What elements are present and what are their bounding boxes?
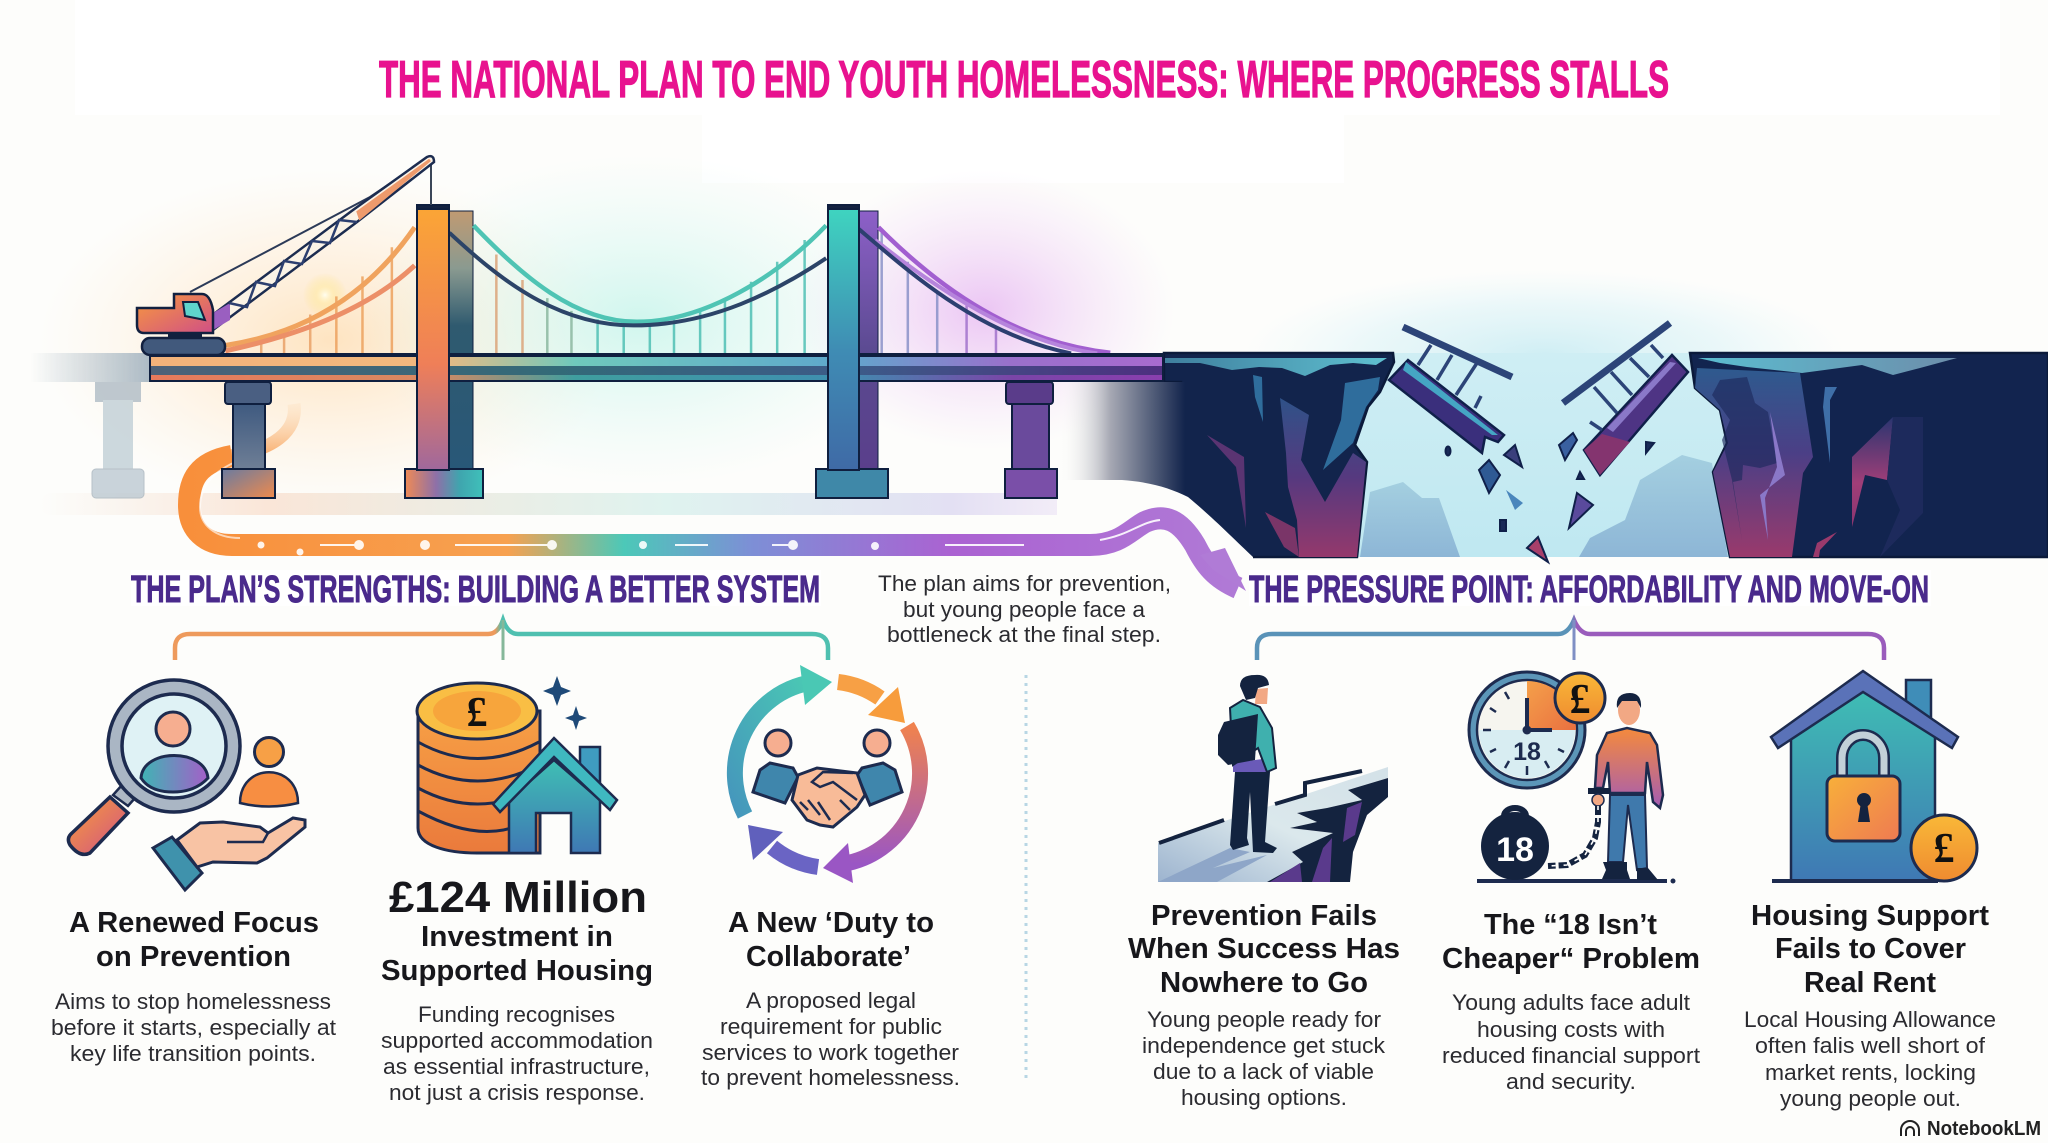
- illustration: bridge: [30, 156, 1164, 498]
- callout text: The plan aims for prevention,: [878, 571, 1171, 596]
- icon: locked house and coin: [1771, 671, 1977, 881]
- body text: housing costs with: [1477, 1017, 1665, 1042]
- watermark: NotebookLM: NotebookLM: [1927, 1118, 2041, 1140]
- heading: Real Rent: [1804, 967, 1936, 999]
- body text: market rents, locking: [1765, 1060, 1976, 1085]
- icon: coins and house: £: [466, 690, 488, 736]
- icon: clock, coin, ball and chain, person: 18: [1496, 831, 1534, 869]
- body text: Funding recognises: [418, 1002, 615, 1027]
- heading: Nowhere to Go: [1160, 967, 1368, 999]
- item: 18 isn't cheaper: [1442, 672, 1700, 1094]
- heading: [1128, 900, 1400, 999]
- body text: services to work together: [702, 1040, 959, 1065]
- left section heading: THE PLAN’S STRENGTHS: BUILDING A BETTER SYSTEM: [131, 569, 820, 611]
- body text: as essential infrastructure,: [383, 1054, 650, 1079]
- left section heading: [131, 569, 821, 611]
- heading: Supported Housing: [381, 955, 653, 987]
- body text: Young people ready for: [1147, 1007, 1381, 1032]
- heading: The “18 Isn’t: [1484, 909, 1657, 941]
- body text: reduced financial support: [1442, 1043, 1700, 1068]
- bracket: strengths: [175, 620, 828, 660]
- body text: not just a crisis response.: [389, 1080, 645, 1105]
- heading: A Renewed Focus: [69, 907, 319, 939]
- body text: to prevent homelessness.: [701, 1065, 960, 1090]
- body text: A proposed legal: [746, 988, 916, 1013]
- heading: Housing Support: [1751, 900, 1989, 932]
- icon: magnifier, person and hand: [68, 680, 305, 890]
- heading: Prevention Fails: [1151, 900, 1377, 932]
- piers: [222, 205, 1057, 498]
- body text: [381, 1002, 653, 1105]
- heading: When Success Has: [1128, 933, 1400, 965]
- body text: Aims to stop homelessness: [55, 989, 331, 1014]
- item: housing support: [1744, 671, 1996, 1111]
- illustration: broken bridge gap with cliffs: [1164, 270, 2048, 562]
- ghost pier: [92, 382, 144, 498]
- rear towers: [449, 211, 473, 498]
- heading: £124 Million: [389, 873, 647, 922]
- illustration: road to the gap: [189, 404, 1246, 591]
- item: investment: [381, 676, 653, 1105]
- crane: [137, 156, 434, 355]
- callout text: bottleneck at the final step.: [887, 622, 1161, 647]
- body text: requirement for public: [720, 1014, 942, 1039]
- icon: handshake in cycle arrows: [735, 665, 920, 883]
- body text: [51, 989, 336, 1066]
- body text: often falis well short of: [1755, 1033, 1986, 1058]
- heading: [1751, 900, 1989, 999]
- deck: [149, 353, 1164, 382]
- callout text: [878, 571, 1171, 647]
- body text: independence get stuck: [1142, 1033, 1386, 1058]
- heading: A New ‘Duty to: [728, 907, 934, 939]
- body text: and security.: [1506, 1069, 1636, 1094]
- heading: Investment in: [421, 921, 613, 953]
- item: prevention: [51, 680, 336, 1066]
- illustration: fade into cliff: [1060, 382, 1190, 557]
- icon: person at broken path: [1158, 675, 1388, 882]
- item: prevention fails: [1128, 675, 1400, 1110]
- body text: due to a lack of viable: [1153, 1059, 1374, 1084]
- heading: [381, 873, 653, 987]
- icon: locked house and coin: £: [1934, 826, 1954, 872]
- heading: Collaborate’: [746, 941, 911, 973]
- illustration: white swoosh: [1057, 480, 1253, 612]
- icon: coins and house: [417, 676, 617, 853]
- body text: before it starts, especially at: [51, 1015, 336, 1040]
- icon: clock, coin, ball and chain, person: 18: [1513, 738, 1541, 766]
- heading: [728, 907, 934, 973]
- bracket: pressure point: [1257, 620, 1884, 660]
- heading: Fails to Cover: [1775, 933, 1966, 965]
- body text: [1442, 990, 1700, 1094]
- body text: [1142, 1007, 1386, 1110]
- body text: [701, 988, 960, 1090]
- body text: young people out.: [1780, 1086, 1961, 1111]
- body text: housing options.: [1181, 1085, 1347, 1110]
- body text: Local Housing Allowance: [1744, 1007, 1996, 1032]
- body text: Young adults face adult: [1452, 990, 1690, 1015]
- body text: key life transition points.: [70, 1041, 316, 1066]
- cables and hangers: [225, 225, 1110, 353]
- heading: [69, 907, 319, 973]
- callout text: but young people face a: [903, 597, 1146, 622]
- item: duty to collaborate: [701, 665, 960, 1090]
- heading: on Prevention: [96, 941, 291, 973]
- heading: [1442, 909, 1700, 975]
- body text: supported accommodation: [381, 1028, 653, 1053]
- icon: clock, coin, ball and chain, person: £: [1570, 677, 1590, 723]
- illustration: colour glow behind bridge: [40, 155, 1180, 515]
- icon: clock, coin, ball and chain, person: [1469, 672, 1676, 884]
- heading: Cheaper“ Problem: [1442, 943, 1700, 975]
- body text: [1744, 1007, 1996, 1111]
